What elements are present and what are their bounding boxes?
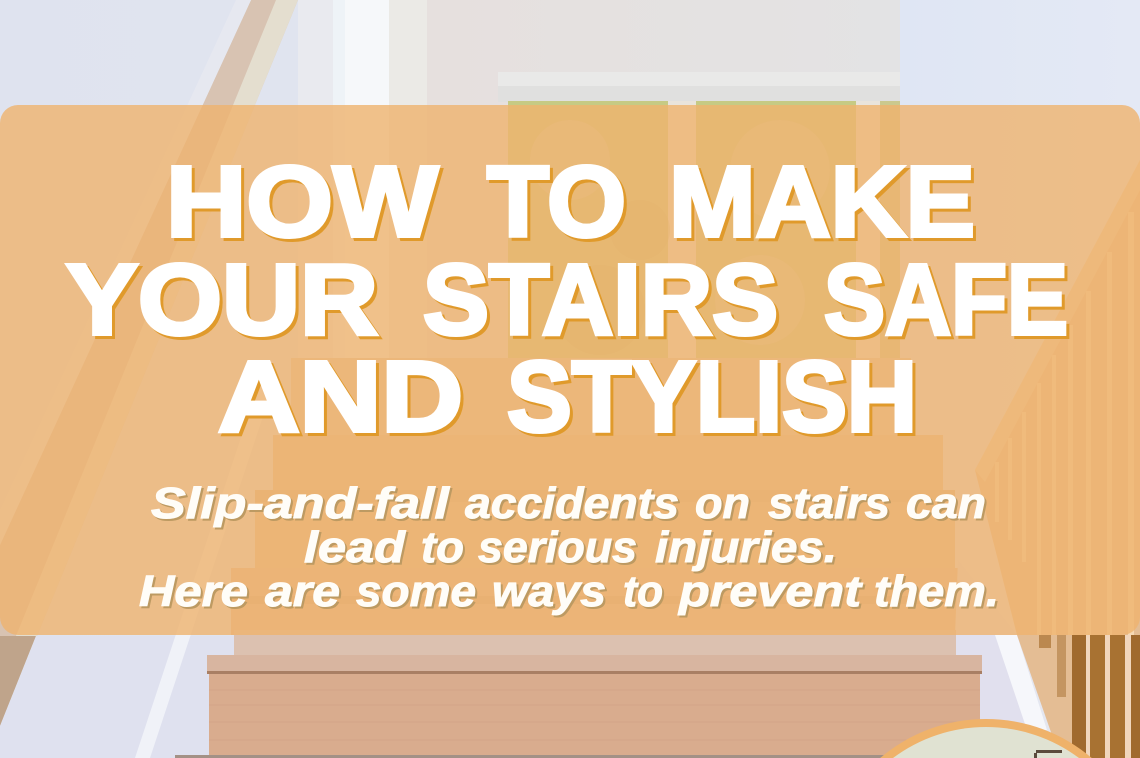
subtitle text block: lead [304,523,406,572]
riser: top visible step [234,630,956,656]
left wall below panel [0,636,234,758]
title: AND [218,341,463,453]
subtitle text block: Here [139,567,248,616]
window frame [498,72,900,358]
circle photo inset [880,719,1092,758]
title: YOUR [66,244,378,356]
panel: translucent orange banner [0,105,1140,635]
upper stair steps [231,358,958,635]
subtitle text block: stairs [768,479,890,528]
subtitle text block: accidents [465,479,679,528]
left wall rail [0,0,298,726]
subtitle text block: are [265,567,340,616]
title: MAKE [669,146,975,258]
right white stringer [995,635,1047,730]
subtitle text block: to [623,567,663,616]
title: TO [487,146,626,258]
title: HOW [166,146,439,258]
right balustrade [975,160,1140,758]
subtitle text block: some [356,567,476,616]
subtitle text block: serious [478,523,637,572]
subtitle text block: them. [874,567,999,616]
right wall below panel [955,560,1047,758]
subtitle text block: prevent [678,567,864,616]
subtitle text block: can [906,479,986,528]
riser: lower step [209,674,980,755]
subtitle text block: on [695,479,750,528]
title: SAFE [824,244,1068,356]
title: STYLISH [507,341,917,453]
tread nose [207,655,982,672]
subtitle text block: Slip-and-fall [151,479,450,528]
left wall stringer [135,380,275,758]
subtitle text block: ways [492,567,606,616]
title: STAIRS [423,244,778,356]
subtitle text block: to [421,523,464,572]
subtitle text block: injuries. [655,523,837,572]
